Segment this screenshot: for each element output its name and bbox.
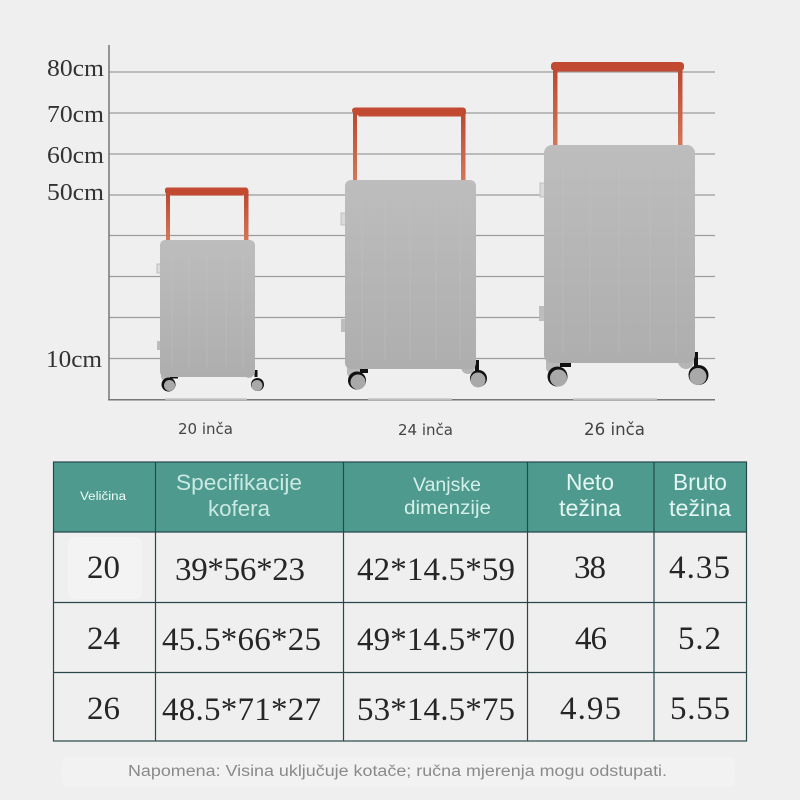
footnote	[62, 757, 735, 787]
header labels: Vanjske	[413, 475, 481, 496]
specification table	[54, 462, 746, 741]
grid lines and axes	[108, 45, 715, 400]
row: 20 inch	[87, 550, 730, 588]
row: 24 inch: 49*14.5*70	[357, 622, 515, 658]
row: 20 inch: 42*14.5*59	[357, 552, 515, 588]
row: 20 inch: 20	[87, 550, 120, 586]
header labels: kofera	[208, 496, 271, 521]
header labels: težina	[559, 495, 621, 521]
table grid	[54, 462, 746, 741]
header labels	[80, 469, 731, 521]
size captions: 26 inča	[584, 420, 645, 440]
axis labels: 10cm	[46, 347, 102, 373]
size captions	[178, 420, 645, 440]
row: 24 inch: 45.5*66*25	[162, 622, 321, 658]
axis labels: 50cm	[47, 180, 104, 206]
row: 26 inch: 26	[87, 691, 120, 727]
row: 26 inch: 53*14.5*75	[357, 692, 515, 728]
row: 26 inch	[87, 691, 730, 728]
table header row	[54, 462, 746, 532]
suitcase: 26 inch	[539, 62, 708, 386]
row: 24 inch: 24	[87, 621, 120, 657]
row: 20 inch: 4.35	[669, 550, 730, 586]
size captions: 24 inča	[398, 421, 453, 439]
row: 26 inch: 48.5*71*27	[162, 692, 321, 728]
header labels: dimenzije	[404, 498, 491, 519]
row: 24 inch: 46	[575, 621, 607, 657]
height chart	[46, 45, 715, 440]
light patch behind size 20	[68, 537, 142, 599]
row: 24 inch	[87, 621, 721, 658]
header labels: Specifikacije	[176, 470, 302, 495]
axis labels	[46, 56, 104, 373]
header labels: Bruto	[673, 469, 727, 495]
header labels: Veličina	[80, 491, 127, 503]
row: 20 inch: 38	[574, 550, 606, 586]
row: 24 inch: 5.2	[678, 621, 721, 657]
size captions: 20 inča	[178, 420, 233, 438]
suitcase: 20 inch	[157, 188, 264, 392]
row: 26 inch: 4.95	[560, 691, 621, 727]
header labels: težina	[669, 495, 731, 521]
axis labels: 70cm	[47, 102, 104, 128]
suitcase: 24 inch	[341, 108, 487, 390]
footnote: Napomena: Visina uključuje kotače; ručna mjerenja mogu odstupati.	[128, 763, 667, 780]
row: 20 inch: 39*56*23	[175, 552, 305, 588]
row: 26 inch: 5.55	[670, 691, 730, 727]
axis labels: 60cm	[47, 143, 104, 169]
header labels: Neto	[566, 469, 614, 495]
axis labels: 80cm	[47, 56, 104, 82]
